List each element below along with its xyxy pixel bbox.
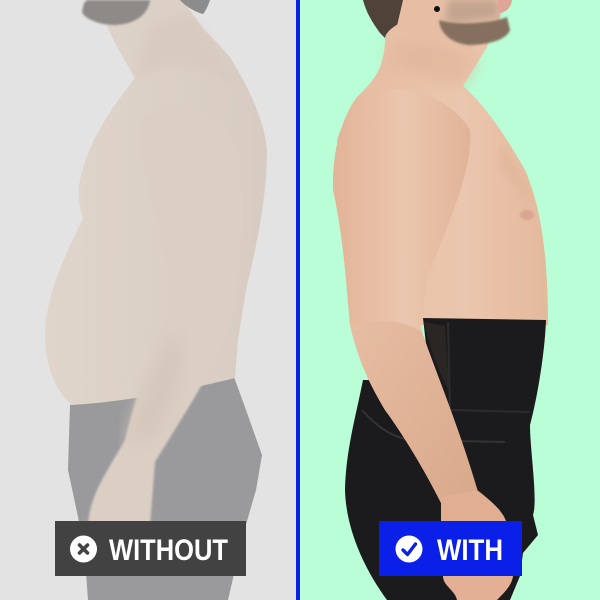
waistband fold <box>448 322 530 412</box>
hand right <box>441 490 507 525</box>
arm right <box>333 89 478 505</box>
fingers right <box>443 576 513 600</box>
panel: without background <box>0 0 296 600</box>
chest shade right <box>500 140 530 205</box>
badge: with <box>379 521 522 576</box>
arm left <box>88 105 241 525</box>
lips right <box>498 0 512 13</box>
badge: without <box>55 521 246 576</box>
shorts right <box>345 318 546 600</box>
forearm shading right <box>350 321 478 505</box>
figure: without, faded torso in grey trousers <box>45 0 267 600</box>
beard right <box>439 17 510 45</box>
label: without: WITHOUT <box>109 534 228 567</box>
divider <box>296 0 300 600</box>
figure: with, torso in black compression shorts <box>333 0 548 600</box>
forearm hair left <box>125 330 183 445</box>
trousers left <box>68 377 262 600</box>
icon: cross in circle <box>70 536 97 562</box>
earring <box>434 6 440 12</box>
hair left <box>180 0 210 14</box>
neck shade right <box>385 40 478 86</box>
beard upper cheek right <box>445 0 498 24</box>
torso left <box>45 0 267 405</box>
armpit hair right <box>424 322 449 390</box>
hair right <box>363 0 405 38</box>
nipple right <box>520 210 534 220</box>
torso right <box>337 0 548 325</box>
label: with: WITH <box>437 534 503 567</box>
shorts seam <box>362 410 505 442</box>
head skin right <box>396 0 500 50</box>
neck shade left <box>135 15 235 85</box>
beard left <box>82 0 150 25</box>
icon: check in circle <box>396 536 422 562</box>
panel: with background <box>299 0 600 600</box>
